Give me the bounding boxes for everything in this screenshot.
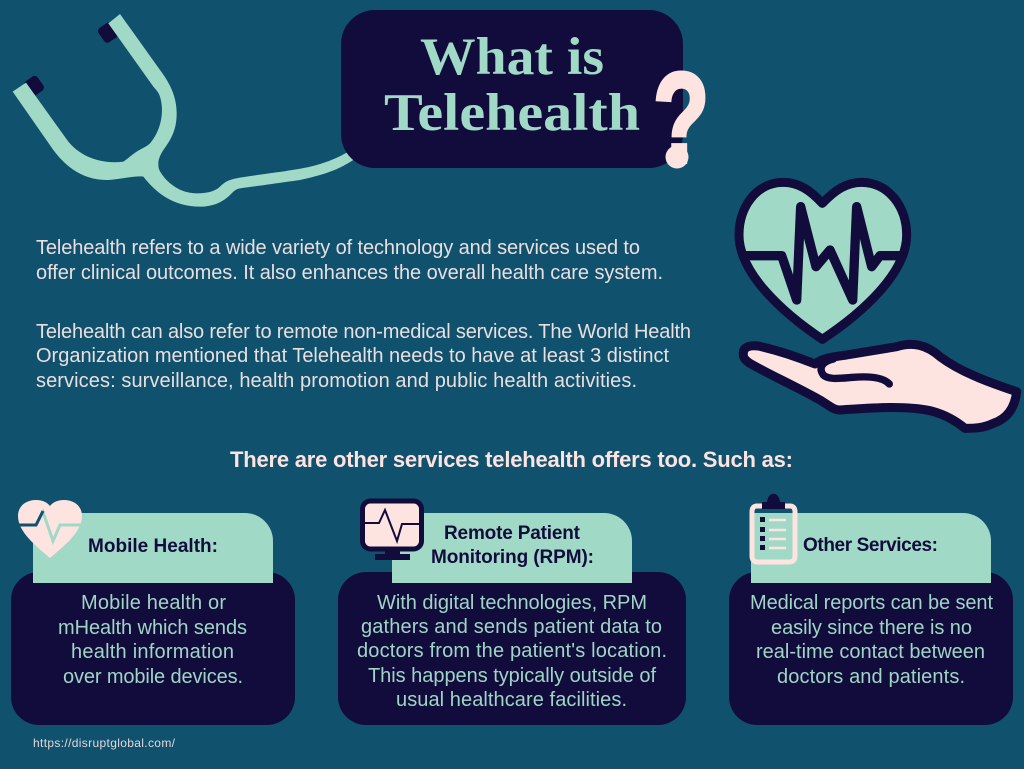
mobile health text: over mobile devices. xyxy=(63,666,243,688)
icon: heart with pulse xyxy=(739,182,907,339)
RPM heading: Remote Patient xyxy=(444,523,581,544)
mobile health text: Mobile health or xyxy=(81,592,226,614)
title box xyxy=(341,10,683,168)
intro text: first paragraph: Telehealth refers to a wide variety of technology and services used to xyxy=(36,237,640,259)
intro text: second paragraph: Telehealth can also refer to remote non-medical services. The World Health xyxy=(36,321,691,343)
title xyxy=(384,28,640,142)
RPM text xyxy=(357,592,667,711)
panel: other services xyxy=(729,494,1013,725)
icon: small heart xyxy=(18,500,82,558)
intro text: first paragraph: offer clinical outcomes. It also enhances the overall health care system. xyxy=(36,262,663,284)
RPM text: gathers and sends patient data to xyxy=(361,616,662,638)
other services text: real-time contact between xyxy=(756,641,985,663)
other services text: easily since there is no xyxy=(771,617,972,639)
panel: remote patient monitoring xyxy=(338,501,686,725)
intro text: second paragraph: services: surveillance, health promotion and public health activities. xyxy=(36,370,637,392)
RPM heading: Monitoring (RPM): xyxy=(431,547,594,568)
RPM text: This happens typically outside of xyxy=(368,665,656,687)
mobile health text: health information xyxy=(71,641,234,663)
icon: question mark: ? xyxy=(653,46,709,190)
other services text: doctors and patients. xyxy=(777,666,965,688)
icon: stethoscope xyxy=(13,14,353,207)
other services text: Medical reports can be sent xyxy=(750,592,993,614)
icon: open hand xyxy=(743,344,1017,428)
intro text: second paragraph xyxy=(36,321,691,392)
mobile health text xyxy=(58,592,247,688)
RPM tab xyxy=(392,513,632,583)
title: What is xyxy=(420,28,604,86)
intro text: first paragraph xyxy=(36,237,663,284)
other services heading: Other Services: xyxy=(803,535,938,556)
mobile health tab xyxy=(33,513,273,583)
panel: mobile health xyxy=(11,500,295,725)
RPM text: usual healthcare facilities. xyxy=(396,689,627,711)
mobile health heading: Mobile Health: xyxy=(88,536,218,557)
source url: https://disruptglobal.com/ xyxy=(33,736,176,750)
RPM heading xyxy=(431,523,594,568)
other services tab xyxy=(751,513,991,583)
RPM text: With digital technologies, RPM xyxy=(377,592,647,614)
icon: clipboard xyxy=(752,494,795,562)
icon: monitor xyxy=(362,501,422,560)
other services text xyxy=(750,592,993,688)
title: Telehealth xyxy=(384,84,640,142)
intro text: second paragraph: Organization mentioned that Telehealth needs to have at least 3 distinct xyxy=(36,345,669,367)
mobile health text: mHealth which sends xyxy=(58,617,247,639)
RPM text: doctors from the patient's location. xyxy=(357,640,667,662)
section heading: There are other services telehealth offers too. Such as: xyxy=(230,447,793,472)
